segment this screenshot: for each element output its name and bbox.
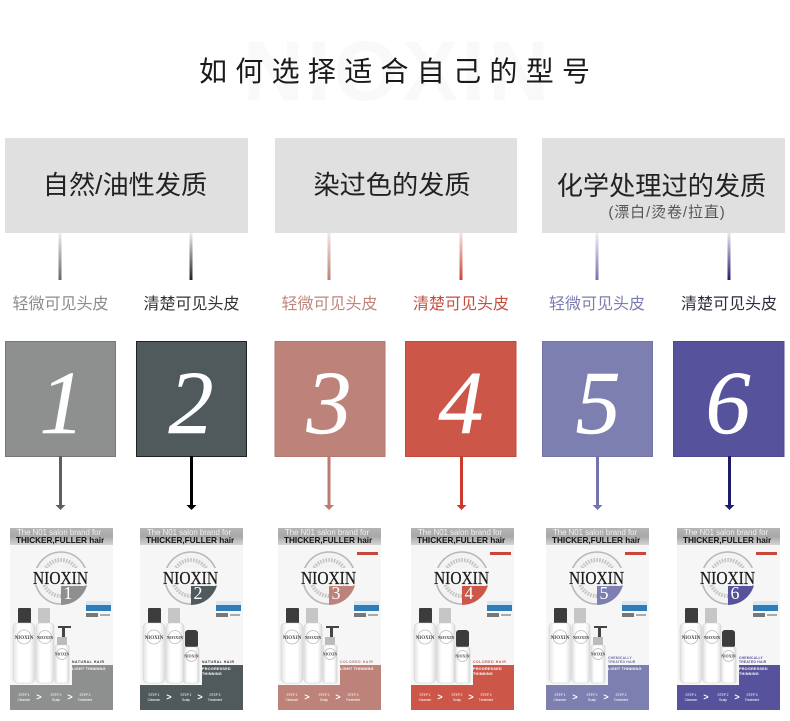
- product box 4: The N01 salon brand for: [418, 528, 502, 537]
- product box 4: Treatment: [479, 698, 493, 702]
- product box 6: PROGRESSED: [739, 667, 768, 671]
- panel: colored hair: [275, 138, 517, 233]
- product box 2: >: [166, 692, 172, 702]
- product box 2: THICKER,FULLER hair: [146, 536, 235, 545]
- connector 2: [190, 233, 192, 280]
- product box 6: STEP 1: [686, 693, 697, 697]
- product box 6: >: [734, 692, 740, 702]
- product box 4: NIOXIN: [434, 568, 489, 588]
- product box 3: THICKER,FULLER hair: [284, 536, 373, 545]
- product box 6: 6: [730, 583, 740, 603]
- product box 2: NIOXIN: [184, 654, 199, 658]
- product box 2: STEP 3: [210, 693, 221, 697]
- product box 5: STEP 2: [587, 693, 598, 697]
- product box 1: NIOXIN: [33, 568, 88, 588]
- product box 1: STEP 1: [19, 693, 30, 697]
- product box 6: NIOXIN: [682, 636, 701, 641]
- product box 5: Cleanser: [554, 698, 567, 702]
- product box 2: PROGRESSED: [202, 667, 231, 671]
- product box 3: >: [335, 692, 341, 702]
- number tile 3: 3: [306, 354, 352, 453]
- connector 6: [728, 233, 730, 280]
- product box 4: STEP 3: [481, 693, 492, 697]
- product box 5: 5: [600, 583, 608, 603]
- product box 5: Treatment: [614, 698, 628, 702]
- label 4: 清楚可见头皮: [413, 295, 509, 313]
- connector 4: [460, 233, 462, 280]
- product box 3: STEP 1: [287, 693, 298, 697]
- number tile 6: 6: [706, 354, 750, 453]
- panel: colored hair: 染过色的发质: [313, 170, 471, 200]
- product box 6: STEP 3: [747, 693, 758, 697]
- product box 2: NIOXIN: [163, 568, 218, 588]
- product box 1: NATURAL HAIR: [72, 660, 105, 664]
- product box 3: NIOXIN: [323, 652, 337, 656]
- product box 5: >: [572, 692, 578, 702]
- number tile 2: 2: [168, 354, 214, 453]
- product box 2: STEP 2: [181, 693, 192, 697]
- label 3: 轻微可见头皮: [281, 295, 378, 313]
- product box 6: Cleanser: [685, 698, 698, 702]
- title: 如何选择适合自己的型号: [199, 56, 598, 87]
- product box 3: Scalp: [320, 698, 328, 702]
- product box 3: 3: [332, 583, 340, 603]
- product box 2: NIOXIN: [145, 636, 164, 641]
- product box 6: TREATED HAIR: [739, 660, 767, 664]
- product box 1: THICKER,FULLER hair: [16, 536, 105, 545]
- number tile 4: [406, 342, 516, 456]
- number tile 4: 4: [438, 354, 484, 453]
- product box 1: >: [67, 692, 73, 702]
- panel: natural / oily hair: 自然/油性发质: [43, 170, 207, 200]
- product box 6: Treatment: [745, 698, 759, 702]
- product box 4: >: [437, 692, 443, 702]
- product box 5: The N01 salon brand for: [553, 528, 637, 537]
- product box 4: PROGRESSED: [473, 667, 502, 671]
- arrow 5: [592, 456, 602, 510]
- arrow 1: [56, 456, 66, 510]
- product box 3: STEP 2: [319, 693, 330, 697]
- product box 3: The N01 salon brand for: [285, 528, 369, 537]
- product box 4: THICKER,FULLER hair: [417, 536, 506, 545]
- product box 6: THINNING: [739, 672, 759, 676]
- product box 4: 4: [464, 583, 474, 603]
- product box 1: NIOXIN: [15, 636, 34, 641]
- number tile 6: [674, 342, 784, 456]
- product box 1: NIOXIN: [37, 635, 54, 640]
- connector 5: [596, 233, 598, 280]
- connector 3: [328, 233, 330, 280]
- product box 6: NIOXIN: [704, 635, 721, 640]
- product box 4: NIOXIN: [455, 654, 470, 658]
- product box 3: NIOXIN: [301, 568, 356, 588]
- product box 1: STEP 3: [80, 693, 91, 697]
- product box 5: STEP 3: [616, 693, 627, 697]
- number tile 5: [542, 342, 652, 456]
- number tile 3: [275, 342, 385, 456]
- connector 1: [58, 233, 62, 280]
- product box 6: STEP 2: [718, 693, 729, 697]
- product box 6: NIOXIN: [721, 654, 736, 658]
- product box 4: NIOXIN: [416, 636, 435, 641]
- product box 3: COLORED HAIR: [340, 660, 373, 664]
- product box 4: Cleanser: [419, 698, 432, 702]
- panel: chemically treated hair: 化学处理过的发质: [557, 171, 766, 201]
- product box 6: The N01 salon brand for: [684, 528, 768, 537]
- product box 2: >: [197, 692, 203, 702]
- product box 3: Treatment: [346, 698, 360, 702]
- number tile 1: [6, 342, 116, 456]
- product box 4: STEP 1: [420, 693, 431, 697]
- product box 2: Cleanser: [148, 698, 161, 702]
- arrow 6: [724, 456, 734, 510]
- product box 5: [546, 528, 649, 710]
- product box 6: >: [703, 692, 709, 702]
- product box 6: Scalp: [719, 698, 727, 702]
- product box 2: Scalp: [182, 698, 190, 702]
- panel: chemically treated hair: (漂白/烫卷/拉直): [608, 204, 726, 221]
- panel: natural / oily hair: [5, 138, 248, 233]
- product box 1: STEP 2: [51, 693, 62, 697]
- product box 4: COLORED HAIR: [473, 660, 506, 664]
- product box 5: NIOXIN: [591, 652, 605, 656]
- product box 1: NIOXIN: [55, 652, 69, 656]
- product box 5: NIOXIN: [573, 635, 590, 640]
- product box 4: >: [468, 692, 474, 702]
- product box 2: Treatment: [208, 698, 222, 702]
- product box 6: NIOXIN: [700, 568, 755, 588]
- product box 6: THICKER,FULLER hair: [683, 536, 772, 545]
- product box 5: CHEMICALLY: [608, 656, 632, 660]
- product box 3: [278, 528, 381, 710]
- label 1: 轻微可见头皮: [12, 295, 109, 313]
- product box 1: >: [36, 692, 42, 702]
- product box 5: STEP 1: [555, 693, 566, 697]
- arrow 4: [456, 456, 466, 510]
- product box 1: The N01 salon brand for: [17, 528, 101, 537]
- number tile 2: [136, 342, 246, 456]
- product box 6: [677, 528, 780, 710]
- product box 5: THICKER,FULLER hair: [552, 536, 641, 545]
- product box 5: TREATED HAIR: [608, 660, 636, 664]
- product box 2: NATURAL HAIR: [202, 660, 235, 664]
- label 5: 轻微可见头皮: [549, 295, 645, 313]
- product box 4: THINNING: [473, 672, 493, 676]
- label 2: 清楚可见头皮: [143, 295, 240, 313]
- product box 1: Scalp: [52, 698, 60, 702]
- number tile 1: 1: [40, 354, 84, 453]
- product box 1: 1: [64, 583, 72, 603]
- product box 2: STEP 1: [149, 693, 160, 697]
- product box 1: [10, 528, 113, 710]
- product box 4: STEP 2: [452, 693, 463, 697]
- product box 4: NIOXIN: [438, 635, 455, 640]
- watermark: NIOXIN: NIOXIN: [243, 24, 549, 118]
- product box 2: THINNING: [202, 672, 222, 676]
- product box 5: NIOXIN: [569, 568, 624, 588]
- panel: chemically treated hair: [542, 138, 785, 233]
- product box 5: LIGHT THINNING: [608, 667, 642, 671]
- label 6: 清楚可见头皮: [681, 295, 777, 313]
- product box 3: LIGHT THINNING: [340, 667, 374, 671]
- product box 5: >: [603, 692, 609, 702]
- product box 1: LIGHT THINNING: [72, 667, 106, 671]
- product box 2: 2: [194, 583, 202, 603]
- product box 1: Treatment: [78, 698, 92, 702]
- product box 4: Scalp: [453, 698, 461, 702]
- product box 3: NIOXIN: [283, 636, 302, 641]
- product box 4: [411, 528, 514, 710]
- product box 1: Cleanser: [18, 698, 31, 702]
- product box 3: Cleanser: [286, 698, 299, 702]
- product box 3: NIOXIN: [305, 635, 322, 640]
- product box 5: Scalp: [588, 698, 596, 702]
- number tile 5: 5: [576, 354, 620, 453]
- product box 2: [140, 528, 243, 710]
- arrow 2: [186, 456, 196, 510]
- product box 3: STEP 3: [348, 693, 359, 697]
- product box 6: CHEMICALLY: [739, 656, 763, 660]
- product box 2: The N01 salon brand for: [147, 528, 231, 537]
- arrow 3: [324, 456, 334, 510]
- product box 5: NIOXIN: [551, 636, 570, 641]
- product box 2: NIOXIN: [167, 635, 184, 640]
- product box 3: >: [304, 692, 310, 702]
